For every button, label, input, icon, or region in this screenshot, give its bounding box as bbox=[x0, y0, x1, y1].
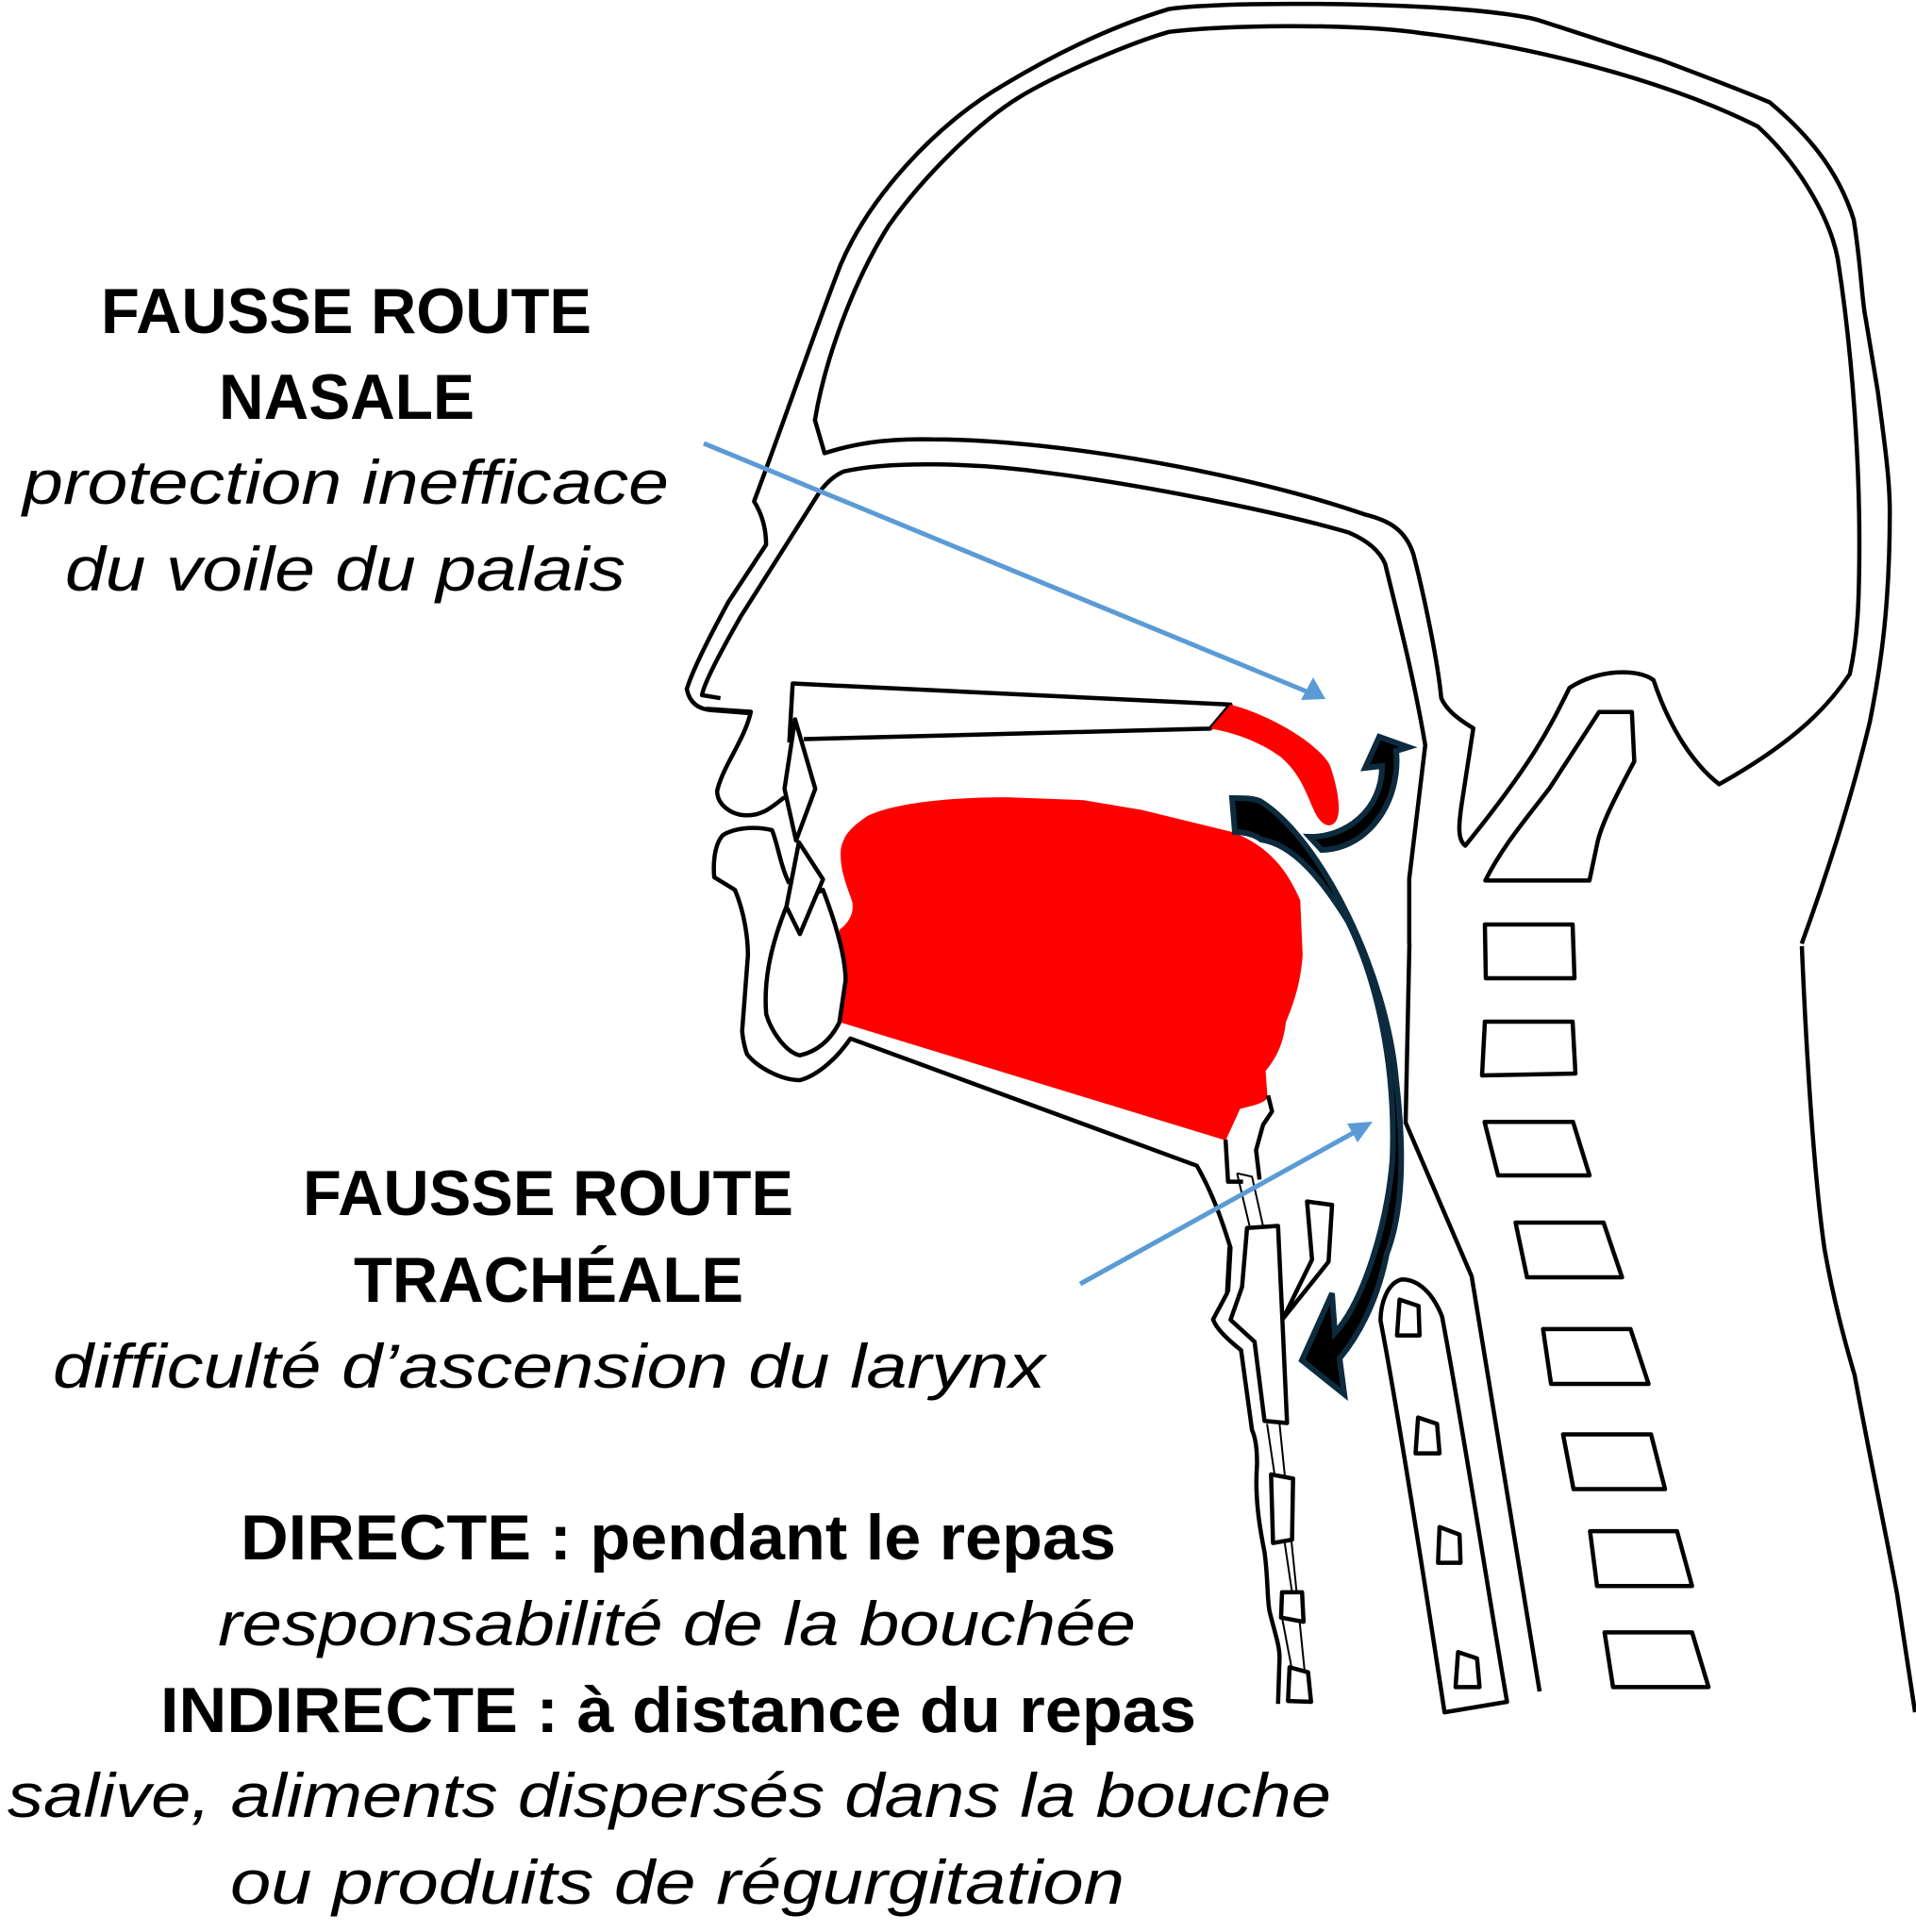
head and neck anatomy diagram bbox=[687, 4, 1915, 1712]
arrow: blue nasal pointer bbox=[704, 443, 1325, 700]
arrow: dark trachea path bbox=[1232, 798, 1401, 1394]
text block: fausse route tracheale: TRACHÉALE bbox=[354, 1244, 743, 1316]
throat front wall bbox=[1213, 1247, 1279, 1704]
tongue in red bbox=[840, 797, 1303, 1141]
hole three bbox=[1438, 1527, 1460, 1563]
hole four bbox=[1456, 1652, 1479, 1687]
text block: directe et indirecte bbox=[8, 1502, 1331, 1917]
text block: directe et indirecte: DIRECTE : pendant le repas bbox=[241, 1502, 1116, 1574]
text block: fausse route tracheale: difficulté d’ascension du larynx bbox=[53, 1331, 1047, 1401]
arrow: blue tracheal pointer bbox=[1080, 1122, 1373, 1284]
text block: fausse route nasale: du voile du palais bbox=[65, 534, 625, 604]
arytenoid bbox=[1283, 1202, 1332, 1319]
oesophagus band bbox=[1380, 1279, 1508, 1712]
text block: directe et indirecte: INDIRECTE : à distance du repas bbox=[160, 1674, 1196, 1746]
vertebra 4 bbox=[1516, 1223, 1622, 1277]
trachea thin lines bbox=[1237, 1174, 1305, 1670]
thyroid cartilage bbox=[1230, 1226, 1287, 1423]
text block: fausse route tracheale bbox=[53, 1158, 1047, 1401]
text block: directe et indirecte: responsabilité de la bouchée bbox=[218, 1589, 1136, 1658]
lower lip, chin and throat bbox=[714, 828, 1230, 1292]
hole one bbox=[1397, 1300, 1420, 1336]
epiglottis bbox=[1225, 1095, 1272, 1182]
text block: fausse route nasale: FAUSSE ROUTE bbox=[101, 275, 591, 347]
vertebra 3 bbox=[1485, 1122, 1590, 1175]
soft palate in red bbox=[1210, 705, 1339, 825]
tracheal ring two bbox=[1281, 1592, 1304, 1622]
tracheal ring three bbox=[1288, 1667, 1311, 1702]
vertebra 1 bbox=[1485, 924, 1574, 978]
tracheal rings bbox=[1271, 1474, 1293, 1543]
vertebra 7 bbox=[1590, 1531, 1692, 1586]
first cervical vertebra bbox=[1485, 712, 1634, 880]
hard palate bbox=[790, 684, 1230, 742]
text block: fausse route nasale bbox=[21, 275, 669, 604]
text block: fausse route tracheale: FAUSSE ROUTE bbox=[303, 1158, 793, 1229]
skull inner contour bbox=[815, 26, 1859, 845]
vertebra 8 bbox=[1605, 1632, 1708, 1687]
vertebra 6 bbox=[1563, 1435, 1665, 1490]
arrow: dark nasal path bbox=[1309, 737, 1408, 850]
upper lip bbox=[706, 708, 785, 815]
jaw bone bbox=[766, 890, 845, 1056]
vertebra 5 bbox=[1543, 1329, 1648, 1384]
text block: directe et indirecte: salive, aliments dispersés dans la bouche bbox=[8, 1760, 1331, 1830]
text block: directe et indirecte: ou produits de régurgitation bbox=[230, 1847, 1125, 1917]
larynx and trachea bbox=[1213, 1095, 1708, 1712]
head outer contour bbox=[687, 4, 1915, 1712]
nasal cavity and pharynx wall bbox=[702, 464, 1540, 1691]
text block: fausse route nasale: protection inefficace bbox=[21, 447, 669, 517]
lower incisor bbox=[787, 842, 823, 934]
vertebra 2 bbox=[1482, 1022, 1575, 1075]
hole two bbox=[1416, 1418, 1440, 1454]
text block: fausse route nasale: NASALE bbox=[219, 361, 475, 433]
upper incisor bbox=[785, 719, 815, 841]
